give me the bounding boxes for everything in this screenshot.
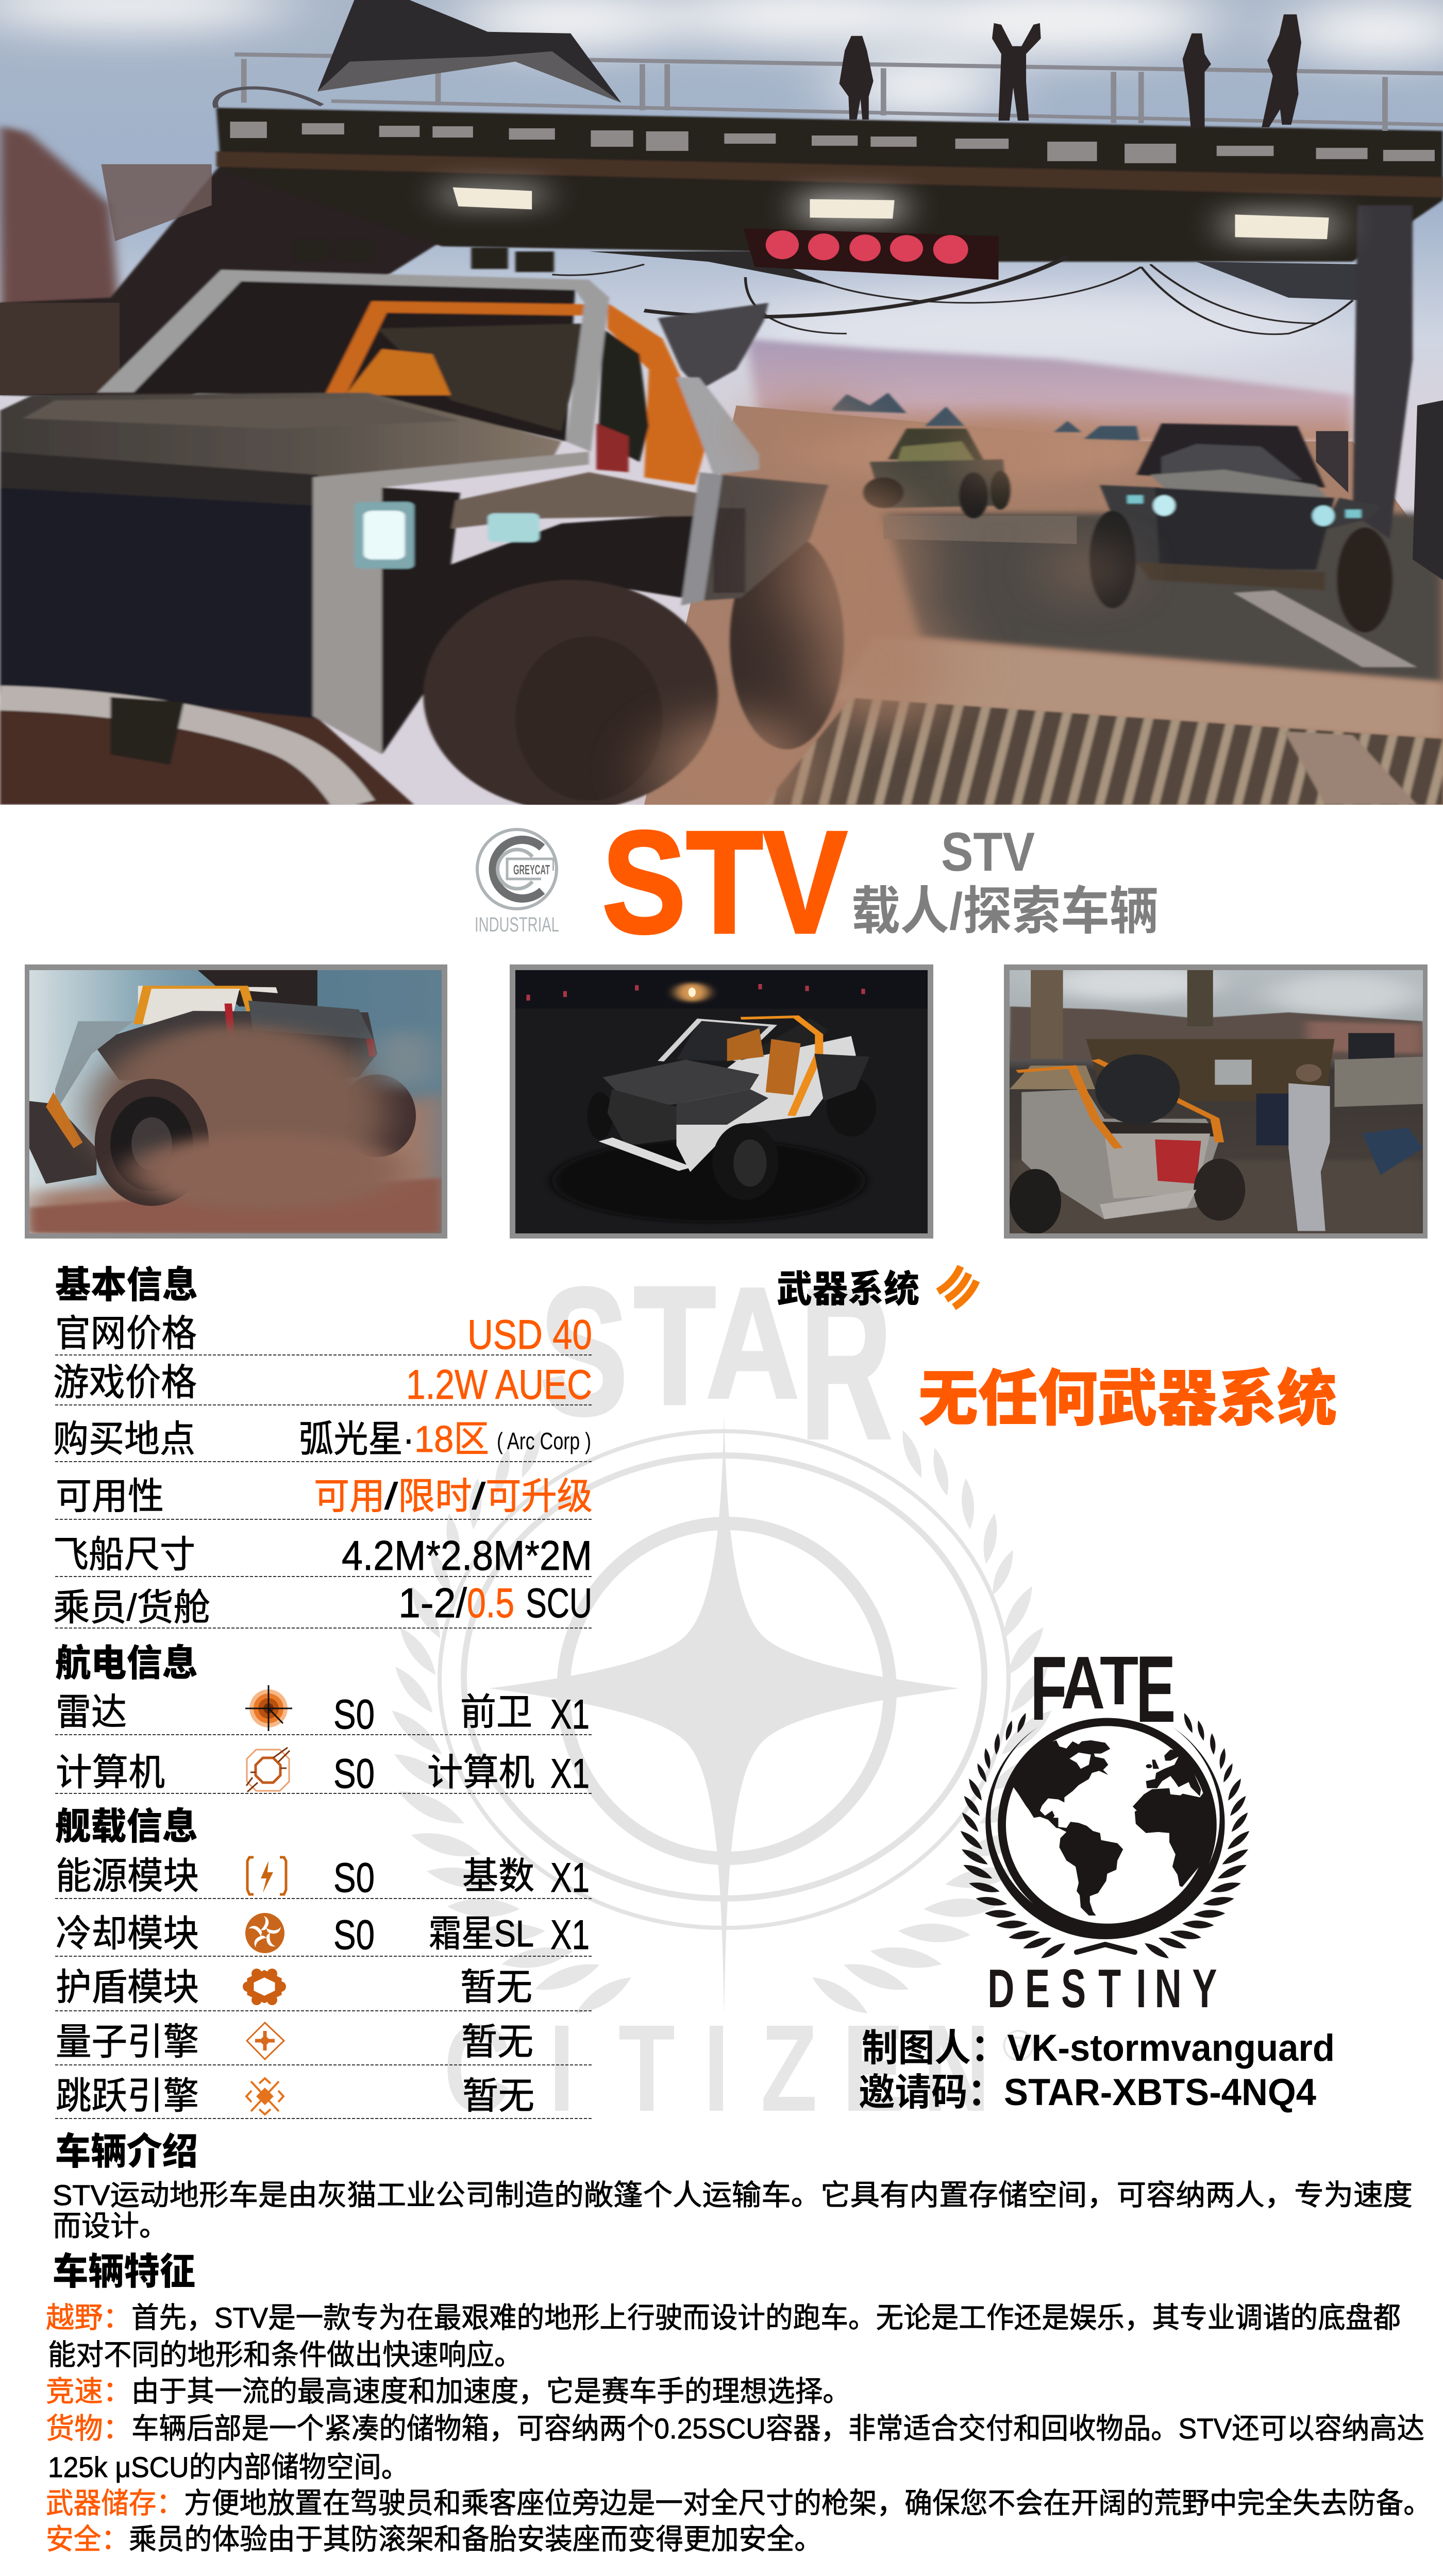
word: FATE: A [1061, 1641, 1105, 1725]
icon: radar [245, 1685, 292, 1731]
row: in-game price: 游戏价格 [53, 1362, 197, 1403]
feature: safety [46, 2516, 822, 2558]
panel: vehicle introduction [53, 2131, 1413, 2242]
vehicle: right grey buggy [1089, 423, 1392, 632]
row: radar: S0 [333, 1691, 375, 1738]
bridge lamps [442, 180, 1339, 244]
watermark word: CITIZEN: CITIZEN [444, 1999, 990, 2137]
left background structures [0, 164, 442, 400]
row: quantum drive: 量子引擎 [56, 2022, 199, 2063]
row: availability: / [472, 1476, 485, 1517]
row: availability [56, 1476, 593, 1517]
row: purchase location [53, 1419, 591, 1460]
globe ring [1002, 1722, 1213, 1928]
feature: safety: 安全： [46, 2516, 129, 2558]
row: availability: / [384, 1476, 398, 1517]
vehicle: far olive buggy [863, 429, 1011, 518]
row: jump drive: 暂无 [462, 2076, 534, 2117]
panel: vehicle features [46, 2251, 1431, 2558]
spectators [840, 14, 1301, 128]
subtitle: vehicle name and type: STV [941, 821, 1035, 883]
row: crew and cargo [53, 1580, 592, 1629]
word: FATE: T [1100, 1642, 1138, 1719]
row: availability: 可升级 [485, 1476, 593, 1517]
cables [552, 257, 1353, 334]
photo frame 1: buggy kicking up dust [25, 964, 447, 1239]
row: quantum drive [56, 2022, 533, 2063]
red lights [744, 228, 999, 280]
row: power module: S0 [333, 1855, 375, 1901]
vehicle: foreground buggy [0, 240, 844, 811]
heading: avionics: 航电信息 [55, 1643, 198, 1684]
row: shield module: 暂无 [460, 1967, 532, 2008]
row: website price: 官网价格 [55, 1313, 197, 1354]
watermark word: STAR: T [634, 1252, 716, 1439]
dust clouds [663, 395, 1104, 826]
feature: racing: 竞速： [46, 2368, 131, 2410]
credits [859, 2018, 1335, 2116]
feature: weapon storage: 武器储存： [46, 2480, 184, 2522]
feature: cargo: 货物： [46, 2405, 131, 2447]
row: purchase location: ( Arc Corp ) [497, 1428, 591, 1454]
bridge [216, 108, 1443, 262]
row: purchase location: 购买地点 [53, 1419, 195, 1460]
row: shield module [56, 1967, 532, 2008]
logo: Greycat Industrial: INDUSTRIAL [475, 913, 559, 936]
row: computer: 计算机 [56, 1752, 165, 1793]
credits: 邀请码：STAR-XBTS-4NQ4 [859, 2062, 1316, 2116]
row: quantum drive: 暂无 [461, 2022, 533, 2063]
row: availability: 可用 [314, 1476, 385, 1517]
icon: shield [243, 1969, 286, 2005]
row: crew and cargo: 1-2/ [398, 1580, 467, 1626]
wreath [958, 1712, 1252, 1961]
feature: off-road: 首先，STV是一款专为在最艰难的地形上行驶而设计的跑车。无论是工作还是娱乐，其专业调谐的底盘都 [131, 2301, 1401, 2334]
feature: off-road: 越野： [46, 2295, 131, 2336]
icon: quantum drive [247, 2023, 284, 2059]
row: availability: 限时 [398, 1476, 472, 1517]
row: jump drive: 跳跃引擎 [56, 2076, 199, 2117]
row: cooling module: S0 [333, 1912, 375, 1958]
pillar [1353, 205, 1413, 539]
row: radar: 前卫 [460, 1692, 532, 1733]
heading: weapon systems [777, 1266, 977, 1310]
row: website price: USD 40 [467, 1312, 592, 1358]
row: availability: 可用性 [56, 1476, 164, 1517]
row: cooling module: 霜星SL [429, 1913, 534, 1955]
row: radar: X1 [550, 1691, 590, 1738]
tarp [317, 0, 621, 103]
feature: safety: 乘员的体验由于其防滚架和备胎安装座而变得更加安全。 [129, 2523, 822, 2555]
callout: no weapon systems: 无任何武器系统 [918, 1365, 1337, 1433]
icon: weapon slashes [938, 1266, 977, 1307]
icon: computer circuit [246, 1748, 290, 1792]
heading: weapon systems: 武器系统 [777, 1269, 919, 1310]
heading: vehicle features: 车辆特征 [53, 2251, 195, 2293]
photo frame 3: buggy with crew member at outpost [1004, 964, 1428, 1239]
logo: Greycat Industrial: GREYCAT [513, 862, 550, 877]
feature: off-road [46, 2295, 1401, 2371]
feature: racing: 由于其一流的最高速度和加速度，它是赛车手的理想选择。 [131, 2375, 850, 2408]
feature: cargo: 125k μSCU的内部储物空间。 [48, 2451, 409, 2483]
row: power module [56, 1855, 590, 1901]
text block: introduction [53, 2179, 1413, 2242]
globe continents [1014, 1740, 1213, 1916]
row: ship size: 4.2M*2.8M*2M [342, 1533, 592, 1579]
row: crew and cargo: 乘员/货舱 [53, 1587, 210, 1629]
feature: cargo [46, 2405, 1424, 2483]
watermark: Star Citizen emblem [387, 1245, 1056, 2137]
heading: components: 舰载信息 [55, 1806, 198, 1848]
row: power module: X1 [550, 1855, 590, 1901]
row: computer [56, 1751, 590, 1797]
logo: Fate Destiny org emblem [958, 1636, 1252, 2019]
icon: power [247, 1857, 286, 1894]
row: computer: 计算机 [427, 1752, 534, 1793]
watermark word: STAR [540, 1245, 892, 1483]
text block: introduction: STV运动地形车是由灰猫工业公司制造的敞篷个人运输车。它具有内置存储空间，可容纳两人，专为速度 [53, 2179, 1413, 2211]
icon: cooling fan [245, 1913, 284, 1953]
railing [234, 55, 1443, 131]
row: radar: 雷达 [56, 1692, 127, 1733]
row: crew and cargo: 0.5 [467, 1580, 514, 1626]
row: ship size: 飞船尺寸 [53, 1534, 195, 1575]
title: STV: STV [602, 801, 848, 963]
row: radar [56, 1691, 590, 1738]
row: cooling module: 冷却模块 [56, 1913, 199, 1955]
row: jump drive [56, 2076, 534, 2117]
row: computer: S0 [333, 1751, 375, 1797]
row: crew and cargo: SCU [526, 1580, 592, 1626]
panel: basic info [53, 1265, 593, 1629]
word: FATE: E [1136, 1636, 1176, 1742]
row: website price [55, 1312, 592, 1358]
watermark word: CITIZEN: ® [1002, 2022, 1035, 2071]
credits: 制图人：VK-stormvanguard [862, 2018, 1335, 2072]
panel: avionics [55, 1643, 593, 1797]
row: power module: 基数 [462, 1856, 534, 1897]
logo: Greycat Industrial [475, 829, 559, 936]
photo frame 2: buggy top view on dark floor [510, 964, 933, 1239]
hero image: off-road vehicles racing under a bridge [0, 0, 1443, 805]
word: FATE: F [1030, 1637, 1067, 1739]
subtitle: vehicle name and type [851, 821, 1159, 940]
row: power module: 能源模块 [56, 1856, 199, 1897]
row: cooling module: X1 [550, 1912, 590, 1958]
row: cooling module [56, 1912, 590, 1958]
row: ship size [53, 1533, 592, 1579]
row: computer: X1 [550, 1751, 590, 1797]
heading: basic info: 基本信息 [55, 1265, 198, 1306]
panel: onboard components [55, 1806, 593, 2119]
watermark word: STAR: R [800, 1245, 892, 1483]
subtitle: vehicle name and type: 载人/探索车辆 [851, 883, 1159, 940]
row: in-game price: 1.2W AUEC [406, 1362, 592, 1408]
word: DESTINY: DESTINY [987, 1958, 1217, 2019]
icon: jump drive [246, 2078, 283, 2114]
feature: off-road: 能对不同的地形和条件做出快速响应。 [48, 2338, 522, 2371]
text block: introduction: 而设计。 [53, 2210, 168, 2242]
feature: weapon storage [46, 2480, 1431, 2522]
row: purchase location: 18区 [414, 1419, 489, 1460]
row: purchase location: 弧光星· [299, 1419, 414, 1460]
heading: vehicle introduction: 车辆介绍 [55, 2131, 198, 2173]
row: in-game price [53, 1362, 592, 1408]
feature: racing [46, 2368, 850, 2410]
row: shield module: 护盾模块 [56, 1967, 199, 2008]
watermark word: STAR: S [540, 1250, 628, 1452]
watermark word: STAR: A [706, 1256, 799, 1431]
word: FATE [1030, 1636, 1176, 1742]
